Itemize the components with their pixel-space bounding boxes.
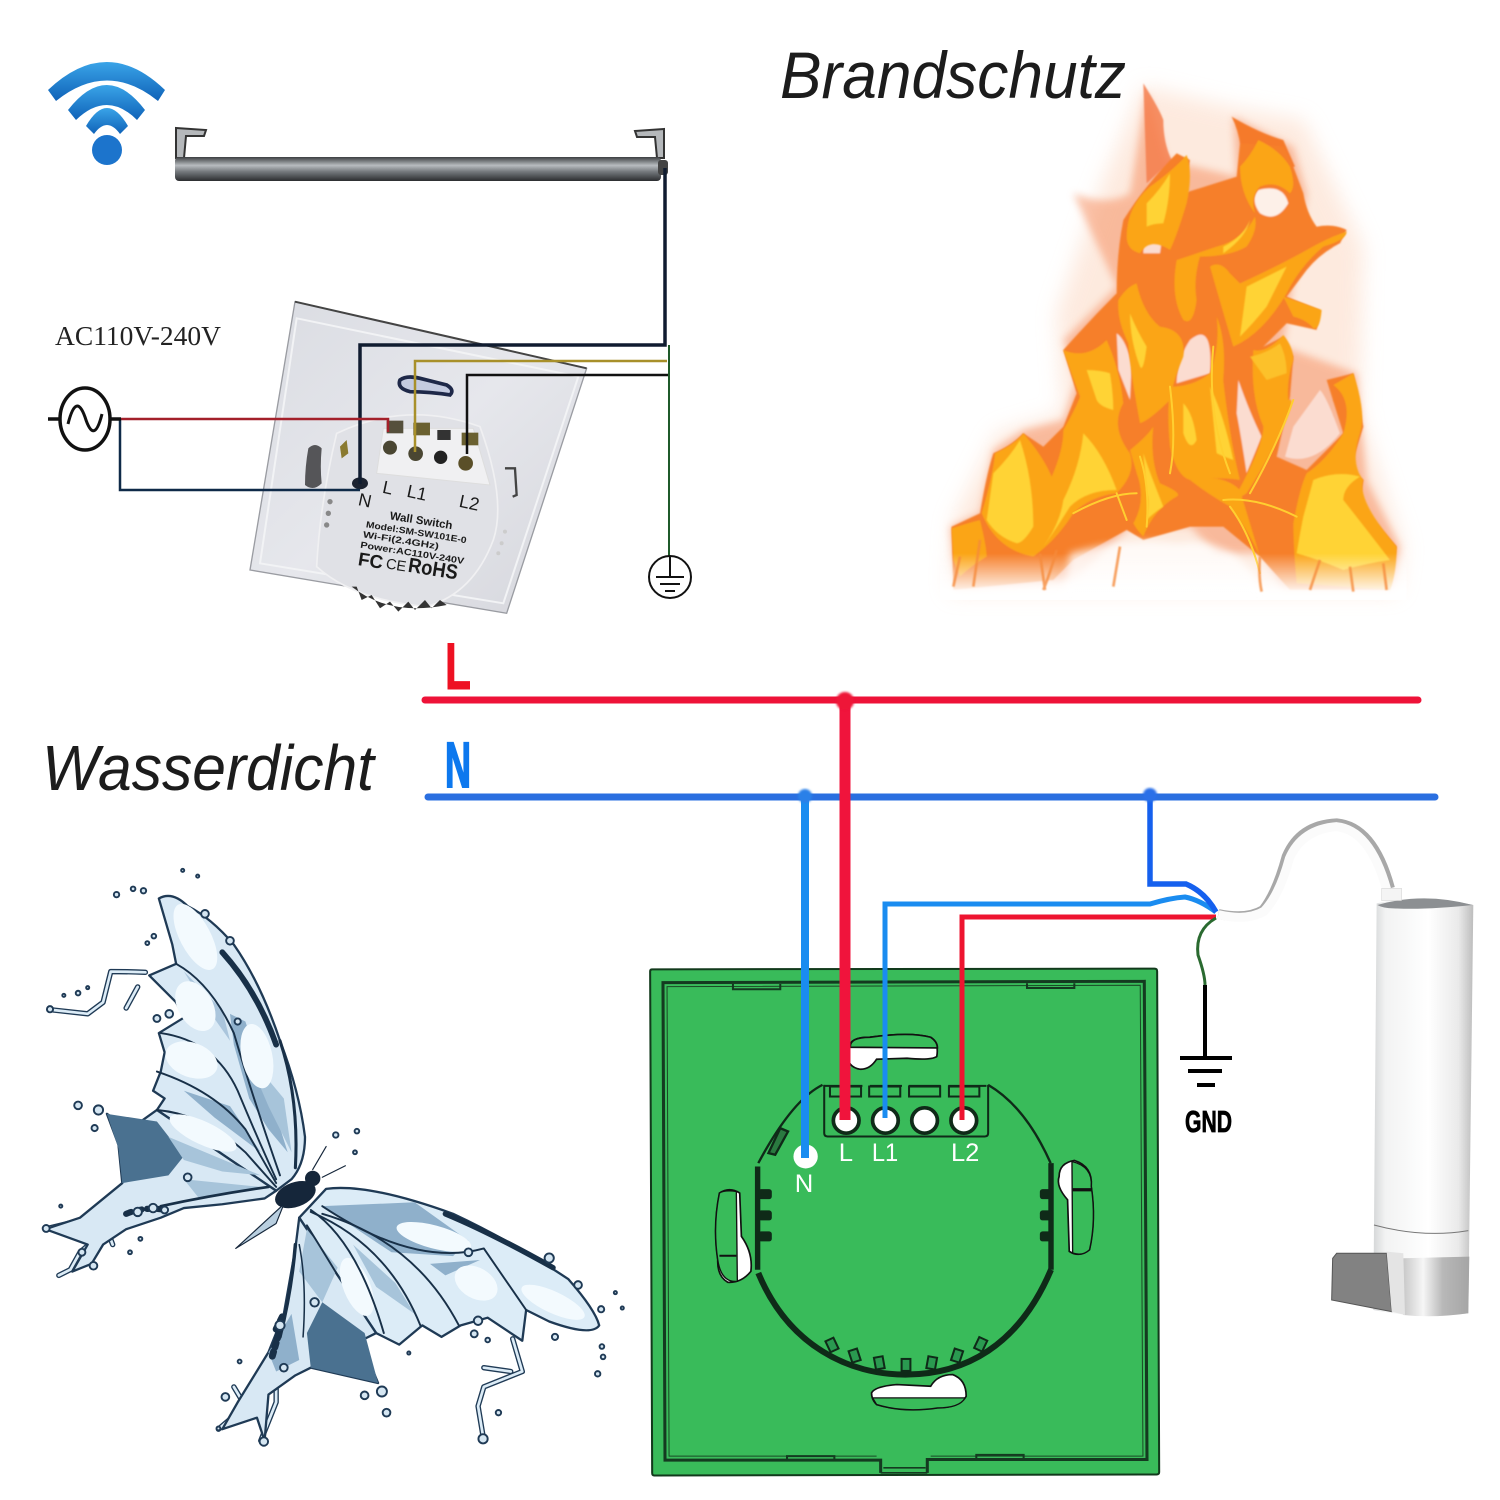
terminal labels: L1 [872, 1139, 898, 1167]
terminal labels: L [839, 1139, 853, 1167]
N line label: N [445, 729, 471, 801]
top keyhole slot [848, 1034, 937, 1069]
wall switch photo: Wi-Fi(2.4GHz) [362, 529, 440, 551]
roller tube motor [175, 128, 668, 181]
flame base fade [940, 553, 1407, 600]
live supply wire [120, 419, 388, 432]
terminal labels [795, 1139, 979, 1198]
lower hindwing [222, 1218, 378, 1441]
white cable [1218, 823, 1390, 916]
circular back housing [758, 1085, 1053, 1375]
wing highlights [160, 897, 589, 1327]
right slot [1058, 1160, 1093, 1254]
L line label: L [445, 629, 471, 703]
wall switch photo: L2 [457, 491, 481, 515]
icon: ground [1180, 985, 1232, 1085]
wall switch photo: RoHS [407, 554, 460, 584]
neutral supply wire [120, 419, 360, 490]
live bus line [425, 696, 1418, 704]
wall switch photo: L1 [405, 481, 429, 505]
switch back panel diagram [650, 969, 1159, 1475]
title: Brandschutz: Brandschutz [780, 38, 1126, 112]
motor neutral wire [1150, 797, 1216, 912]
terminal block [824, 1085, 988, 1136]
icon: earth symbol [649, 556, 691, 598]
water droplets [43, 869, 624, 1446]
water splash tendrils [47, 972, 522, 1441]
left slot [716, 1190, 751, 1282]
L2 wire to motor [962, 917, 1216, 1120]
upper wing shadows [107, 972, 292, 1198]
icon: AC source [48, 388, 121, 450]
L1 wire to motor [885, 897, 1216, 1118]
lower wing veins [272, 1206, 553, 1356]
L1 wire [415, 361, 667, 452]
upper hindwing [45, 1110, 276, 1272]
upper wing veins [126, 952, 296, 1214]
lower wing shadows [268, 1202, 480, 1383]
water butterfly [43, 869, 624, 1446]
upper forewing [149, 896, 305, 1191]
wall switch photo: N [356, 489, 373, 512]
fire illustration [940, 83, 1407, 600]
live drop to switch [840, 700, 850, 1120]
motor body [1373, 899, 1473, 1316]
butterfly body [236, 1147, 345, 1248]
neutral bus line [428, 794, 1435, 800]
wall switch photo: FC [357, 548, 385, 573]
bottom keyhole slot [872, 1375, 966, 1410]
wall switch photo: Power:AC110V-240V [360, 540, 465, 566]
wall switch photo: CE [385, 556, 408, 575]
lower forewing [299, 1188, 599, 1345]
label: AC voltage: AC110V-240V [55, 321, 222, 351]
icon: wifi [48, 62, 165, 165]
panel inner frame [663, 981, 1147, 1473]
wall switch photo: Wall Switch [389, 510, 453, 532]
motor and neutral wire [360, 168, 665, 484]
neutral drop to switch [801, 797, 809, 1158]
panel body [650, 969, 1159, 1475]
N terminal hole [793, 1144, 818, 1168]
wall switch photo [250, 302, 587, 613]
title: Wasserdicht: Wasserdicht [42, 732, 376, 804]
label: GND: GND [1185, 1104, 1232, 1139]
wall switch photo: L [381, 477, 395, 499]
wall switch photo: Model:SM-SW101E-0 [365, 519, 467, 545]
earth wire [668, 345, 670, 556]
terminal labels: N [795, 1170, 813, 1198]
earth wire to motor [1198, 918, 1216, 985]
tubular motor and cable [1218, 823, 1473, 1316]
terminal labels: L2 [951, 1139, 979, 1167]
L2 wire [467, 375, 668, 454]
